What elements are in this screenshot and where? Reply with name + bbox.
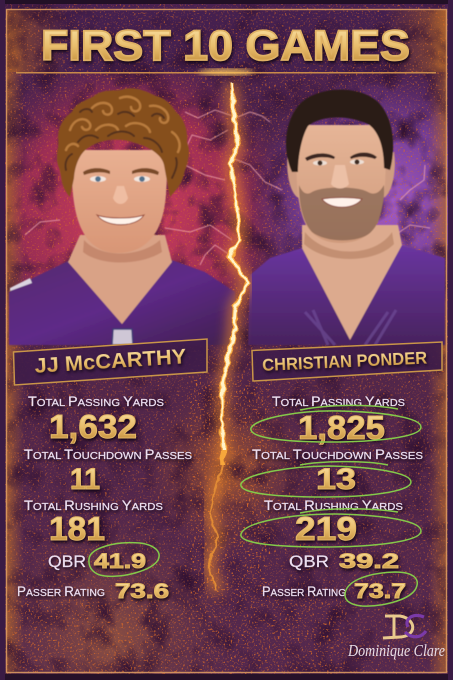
stat: total touchdown passes bbox=[252, 447, 423, 496]
stats: JJ McCarthy bbox=[17, 394, 192, 603]
watermark: Dominique Clare logo bbox=[347, 615, 445, 660]
stat: total passing yards bbox=[272, 394, 405, 446]
stat: passer rating: 73.6 bbox=[115, 580, 169, 603]
hair bbox=[286, 90, 393, 172]
eyes and brows bbox=[83, 168, 159, 182]
ears bbox=[287, 152, 395, 198]
nose bbox=[113, 186, 128, 204]
stat: total rushing yards: TOTAL RUSHING YARDS bbox=[264, 498, 403, 513]
stat: total passing yards bbox=[28, 394, 164, 445]
stat: passer rating: PASSER RATING bbox=[262, 584, 346, 599]
nose bbox=[331, 165, 349, 188]
stat: total passing yards: TOTAL PASSING YARDS bbox=[28, 394, 164, 409]
face bbox=[72, 150, 167, 253]
title: FIRST 10 GAMES bbox=[41, 23, 410, 70]
stat: total touchdown passes: TOTAL TOUCHDOWN PASSES bbox=[252, 447, 423, 462]
stat: total touchdown passes: 11 bbox=[70, 463, 100, 496]
lightning branches bbox=[25, 110, 430, 265]
stat: QBR bbox=[48, 550, 146, 573]
stat: total rushing yards bbox=[264, 498, 403, 547]
stat: passer rating: PASSER RATING bbox=[17, 584, 105, 599]
stat: total touchdown passes bbox=[24, 447, 192, 496]
jersey bbox=[248, 245, 445, 345]
stat: total passing yards: TOTAL PASSING YARDS bbox=[272, 394, 405, 409]
stat: total touchdown passes: 13 bbox=[316, 463, 356, 496]
stat: QBR: QBR bbox=[289, 552, 329, 571]
stat: total rushing yards: 181 bbox=[49, 510, 105, 547]
stat: total passing yards: 1,825 bbox=[298, 409, 385, 446]
neck bbox=[302, 225, 402, 340]
stat: total rushing yards bbox=[24, 498, 163, 547]
smile bbox=[322, 198, 362, 207]
name plate: JJ McCarthy bbox=[14, 339, 207, 385]
player photo: Christian Ponder bbox=[248, 90, 445, 345]
stat: passer rating: 73.7 bbox=[354, 580, 406, 603]
green highlight circles bbox=[89, 405, 421, 606]
stat: total touchdown passes: TOTAL TOUCHDOWN PASSES bbox=[24, 447, 192, 462]
jersey bbox=[9, 260, 236, 345]
name plate: Christian Ponder bbox=[252, 342, 442, 381]
stat: QBR: QBR bbox=[48, 552, 86, 571]
stat: passer rating bbox=[17, 580, 169, 603]
stat: QBR bbox=[289, 550, 399, 573]
eyes and brows bbox=[305, 152, 377, 166]
neck bbox=[68, 235, 172, 324]
name plate: Christian Ponder: CHRISTIAN PONDER bbox=[262, 348, 428, 375]
smile bbox=[97, 215, 144, 225]
icon: DC monogram bbox=[383, 615, 426, 638]
stat: total rushing yards: TOTAL RUSHING YARDS bbox=[24, 498, 163, 513]
title band line bbox=[16, 69, 436, 75]
NFL shield bbox=[112, 329, 133, 345]
stat: total passing yards: 1,632 bbox=[49, 408, 137, 445]
stats: Christian Ponder bbox=[252, 394, 423, 603]
stat: QBR: 41.9 bbox=[94, 550, 146, 573]
player photo: JJ McCarthy bbox=[9, 88, 236, 345]
stat: passer rating bbox=[262, 580, 406, 603]
stat: QBR: 39.2 bbox=[339, 550, 399, 573]
face bbox=[296, 125, 386, 243]
name plate: JJ McCarthy: JJ McCARTHY bbox=[34, 345, 187, 378]
hair bbox=[57, 88, 189, 197]
lightning bolt bbox=[208, 83, 248, 593]
stubble bbox=[299, 185, 384, 240]
stat: total rushing yards: 219 bbox=[295, 510, 357, 547]
